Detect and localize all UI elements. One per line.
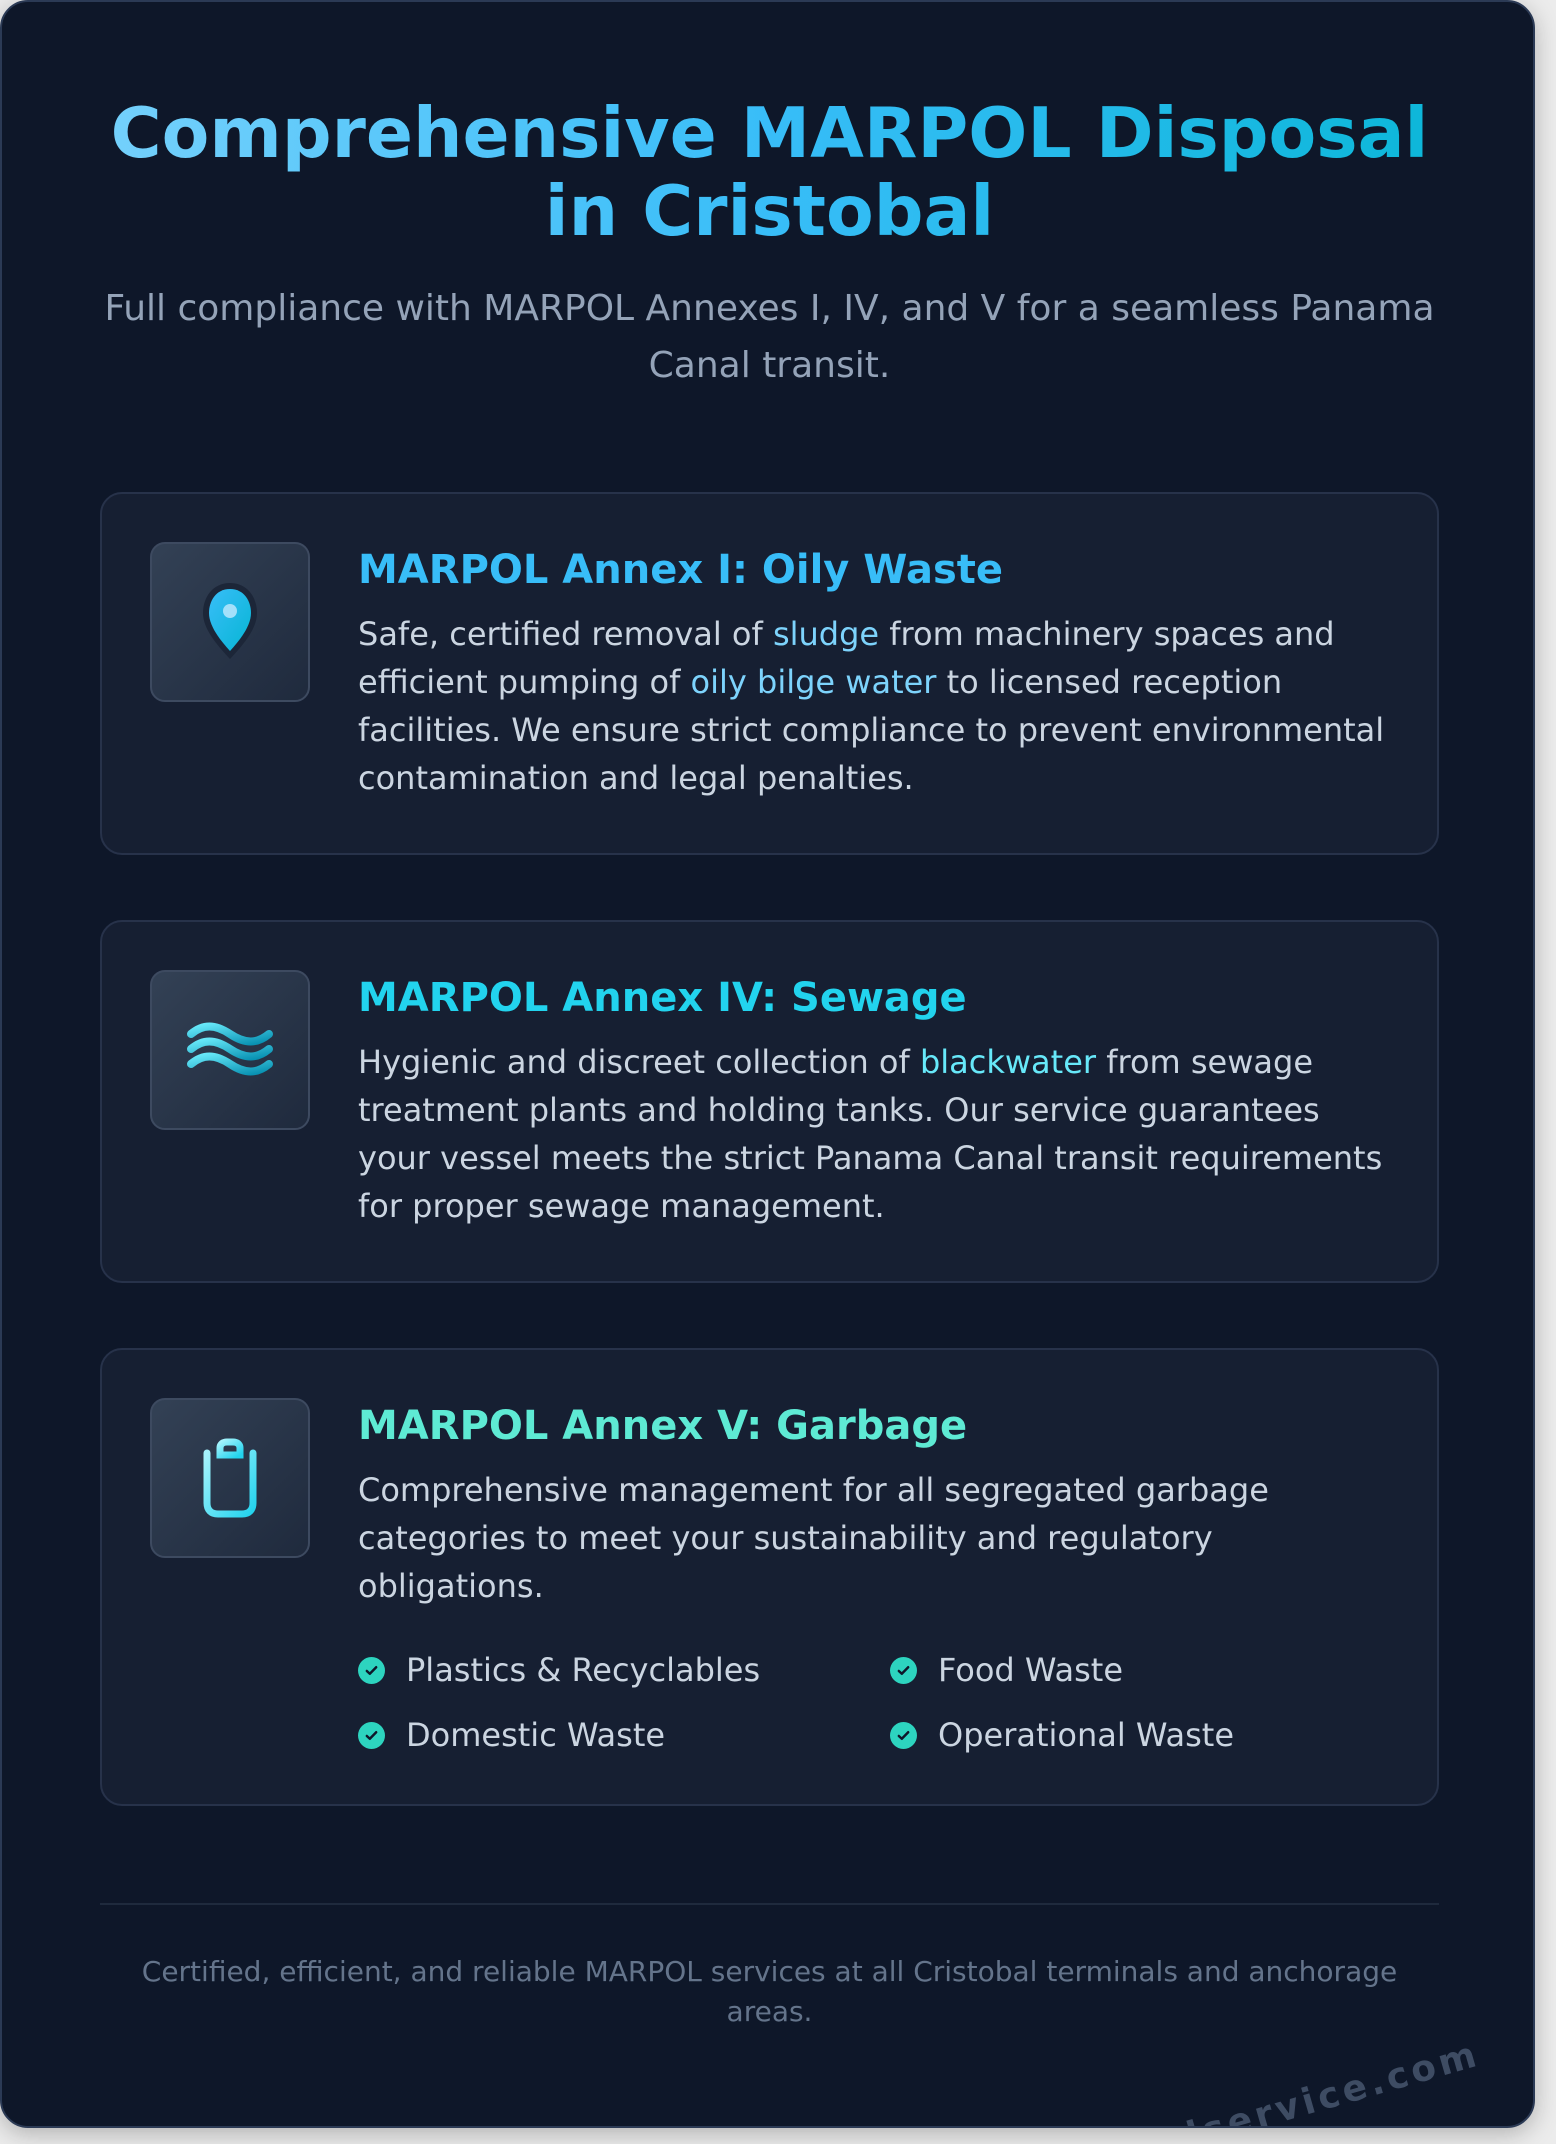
text: Safe, certified removal of sludge from machinery spaces and efficient pumping of oily bilge water to licensed reception facilities. We ensure strict compliance to prevent environmental contamination and legal penalties. [358, 615, 1384, 797]
heading: MARPOL Annex I: Oily Waste [358, 547, 1003, 593]
heading: MARPOL Annex V: Garbage [358, 1403, 967, 1449]
icon: bag [150, 1398, 310, 1558]
checklist item: Operational Waste [938, 1716, 1234, 1754]
title [2, 95, 1537, 251]
checklist item: Food Waste [938, 1651, 1123, 1689]
text: Comprehensive management for all segregated garbage categories to meet your sustainability and regulatory obligations. [358, 1471, 1269, 1605]
panel: annex IV [100, 920, 1439, 1283]
subtitle: Full compliance with MARPOL Annexes I, IV, and V for a seamless Panama Canal transit. [104, 288, 1434, 386]
title: in Cristobal [545, 171, 994, 252]
icon: location drop [150, 542, 310, 702]
icon: waves [150, 970, 310, 1130]
heading: MARPOL Annex IV: Sewage [358, 975, 967, 1021]
checklist item: Plastics & Recyclables [406, 1651, 760, 1689]
panel: annex I [100, 492, 1439, 855]
footer: Certified, efficient, and reliable MARPOL services at all Cristobal terminals and anchorage areas. [142, 1955, 1397, 2028]
title: Comprehensive MARPOL Disposal [111, 93, 1428, 174]
panel: annex V [100, 1348, 1439, 1806]
checklist item: Domestic Waste [406, 1716, 665, 1754]
text: Hygienic and discreet collection of blackwater from sewage treatment plants and holding tanks. Our service guarantees your vessel meets the strict Panama Canal transit requirements for proper sewage management. [358, 1043, 1382, 1225]
